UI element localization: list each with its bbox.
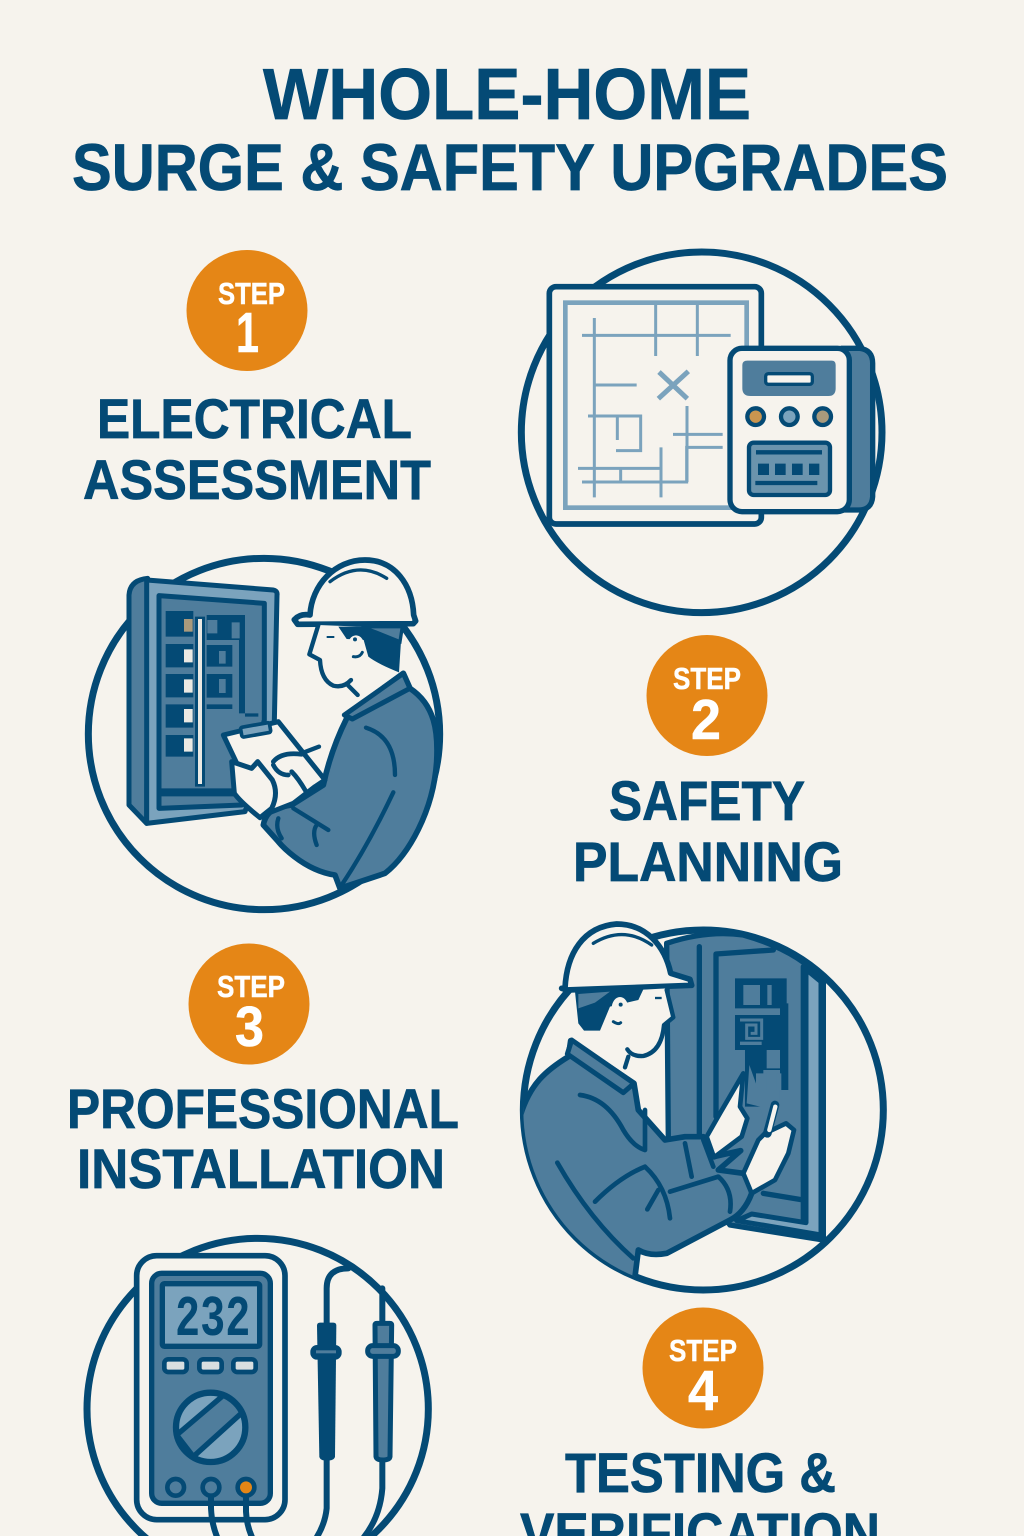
step 4 heading — [520, 1441, 880, 1536]
step 4 badge — [642, 1308, 764, 1428]
input ports — [167, 1479, 254, 1496]
hands — [232, 754, 306, 818]
floor plan sheet — [549, 287, 761, 524]
meter buttons — [164, 1359, 256, 1372]
step 4 badge: 4 — [688, 1359, 718, 1423]
step 3 heading: PROFESSIONAL — [67, 1077, 459, 1140]
step 2 badge: STEP — [673, 661, 741, 696]
step 3 heading: INSTALLATION — [77, 1137, 445, 1200]
step 2 heading — [573, 769, 843, 893]
step 2 badge — [646, 635, 768, 756]
step 3 badge — [188, 944, 310, 1064]
step 1 badge: 1 — [236, 301, 259, 365]
hands and tool — [707, 1065, 794, 1193]
step 4 heading: TESTING & — [565, 1441, 836, 1504]
right probe — [368, 1323, 398, 1460]
hard hat — [562, 924, 692, 990]
step 1 badge: STEP — [218, 276, 285, 311]
icon: digital multimeter with probes — [87, 1238, 428, 1536]
step 4 badge: STEP — [669, 1333, 737, 1368]
selector dial — [176, 1392, 245, 1462]
meter display: 232 — [175, 1288, 250, 1353]
step 2 heading: SAFETY — [609, 769, 805, 832]
step 3 badge: 3 — [235, 995, 264, 1059]
jacket — [517, 1040, 752, 1290]
clipboard — [223, 722, 325, 816]
icon: floor plan and control device — [521, 252, 882, 613]
title: SURGE & SAFETY UPGRADES — [72, 130, 948, 204]
title — [72, 55, 948, 204]
probe leads — [211, 1268, 382, 1536]
multimeter body — [137, 1256, 285, 1520]
title: WHOLE-HOME — [263, 55, 751, 135]
head and hair — [575, 988, 673, 1067]
step 3 badge: STEP — [217, 969, 285, 1004]
step 2 heading: PLANNING — [573, 830, 843, 893]
step 3 heading — [67, 1077, 459, 1200]
electrical cabinet — [667, 934, 823, 1240]
step 1 badge — [186, 250, 308, 371]
breaker panel — [129, 578, 277, 823]
step 1 heading: ELECTRICAL — [97, 387, 412, 450]
control device — [730, 348, 873, 512]
jacket — [263, 673, 437, 888]
step 2 badge: 2 — [691, 688, 721, 752]
hard hat — [294, 560, 416, 624]
icon: electrician installing surge device — [517, 924, 883, 1290]
step 1 heading: ASSESSMENT — [83, 448, 431, 511]
icon: electrician inspecting panel with clipboard — [88, 558, 440, 910]
meter display — [162, 1284, 260, 1353]
left probe — [310, 1323, 342, 1461]
head and hair — [309, 625, 403, 695]
step 1 heading — [83, 387, 431, 511]
